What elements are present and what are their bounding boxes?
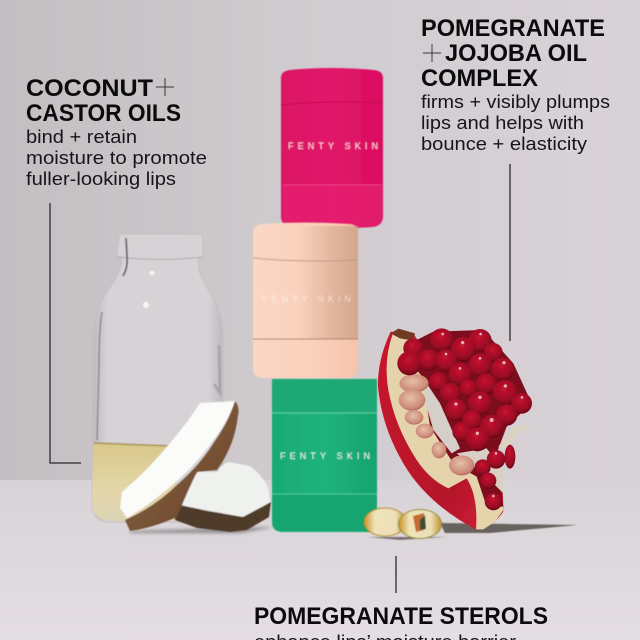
leader line: pomegranate sterols bbox=[395, 556, 397, 593]
capsule shadow bbox=[368, 537, 446, 540]
rind bbox=[378, 332, 503, 530]
heading: CASTOR OILS bbox=[26, 100, 181, 127]
table surface bbox=[0, 480, 640, 640]
description: moisture to promote bbox=[26, 147, 207, 168]
pink jar bbox=[281, 68, 383, 228]
heading bbox=[26, 75, 181, 127]
capsule right bbox=[398, 510, 442, 538]
red arils bbox=[397, 328, 532, 510]
membrane bbox=[420, 373, 460, 453]
oil bbox=[92, 444, 175, 521]
coconut wedge front bbox=[120, 401, 239, 531]
leader line: pomegranate and jojoba bbox=[509, 164, 511, 341]
leader line: coconut and castor oils bbox=[50, 203, 81, 463]
capsule left bbox=[364, 508, 406, 536]
coconut pieces bbox=[120, 401, 275, 533]
bottle glass bbox=[92, 234, 223, 522]
callout: coconut and castor oils bbox=[26, 75, 207, 189]
shadow from pink jar bbox=[298, 226, 358, 339]
description bbox=[421, 91, 610, 154]
aril highlights bbox=[441, 333, 523, 497]
callout: pomegranate and jojoba oil complex bbox=[421, 15, 610, 154]
heading: COMPLEX bbox=[421, 65, 538, 92]
heading: POMEGRANATE STEROLS bbox=[254, 603, 548, 630]
brand label: FENTY SKIN bbox=[288, 141, 378, 151]
heading: POMEGRANATE bbox=[421, 15, 605, 42]
glass bottle with oil bbox=[92, 234, 223, 522]
pomegranate shadow bbox=[440, 523, 578, 533]
inner fruit backing bbox=[403, 330, 532, 507]
peach jar bbox=[253, 222, 358, 378]
green jar bbox=[272, 379, 377, 532]
stem bbox=[391, 329, 415, 341]
pale arils bbox=[399, 374, 474, 475]
background wall bbox=[0, 0, 640, 480]
pith bbox=[387, 334, 503, 529]
coconut chunk back bbox=[175, 462, 271, 532]
description: bounce + elasticity bbox=[421, 133, 588, 154]
heading: COCONUT bbox=[26, 75, 153, 102]
brand label: FENTY SKIN bbox=[280, 451, 370, 461]
heading bbox=[421, 15, 605, 92]
description: lips and helps with bbox=[421, 112, 584, 133]
heading: JOJOBA OIL bbox=[445, 40, 587, 67]
pomegranate bbox=[378, 328, 533, 530]
callout: pomegranate sterols bbox=[254, 603, 548, 640]
brand label: FENTY SKIN bbox=[262, 294, 351, 304]
description: firms + visibly plumps bbox=[421, 91, 610, 112]
description: fuller-looking lips bbox=[26, 168, 176, 189]
softgel capsules bbox=[364, 508, 446, 540]
description: bind + retain bbox=[26, 126, 137, 147]
description bbox=[26, 126, 207, 189]
coconut shadow bbox=[130, 527, 275, 533]
